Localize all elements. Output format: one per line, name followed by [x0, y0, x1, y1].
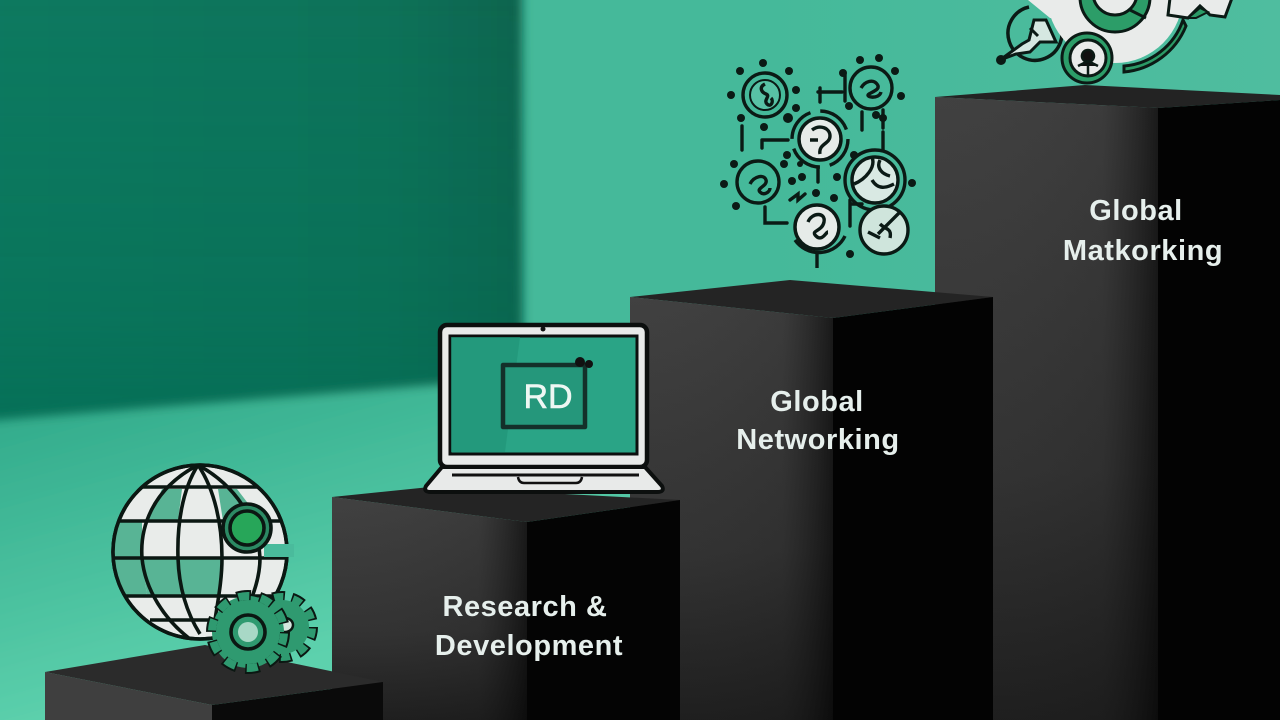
- back gear: [252, 597, 312, 657]
- icon: marketing gears: [998, 0, 1232, 83]
- label: Global Matkorking: Matkorking: [1063, 235, 1223, 267]
- large ring gear: [1028, 0, 1186, 72]
- notch in globe: [264, 544, 294, 557]
- green node: [223, 504, 271, 552]
- icon: globe with gears: [100, 465, 312, 668]
- partial gear top right: [1168, 0, 1232, 18]
- satellite dots: [720, 54, 916, 258]
- connector lines: [742, 75, 883, 226]
- label: Research & Development: Development: [435, 630, 623, 662]
- label: Research & Development: Research &: [442, 591, 608, 623]
- block 4: global marketing: [935, 85, 1280, 720]
- icon: laptop with RD: [425, 325, 663, 492]
- label: Global Networking: Global: [770, 386, 864, 418]
- small target icon: [998, 7, 1062, 64]
- small globe icon: [1062, 33, 1112, 83]
- icon: network of globes: [720, 54, 916, 268]
- RD frame: [503, 357, 593, 427]
- front gear: [212, 596, 284, 668]
- block 1: [45, 645, 383, 720]
- globe: [100, 465, 300, 639]
- node globes: [737, 67, 908, 254]
- label: Global Networking: Networking: [736, 424, 900, 456]
- block 2: research and development: [332, 487, 680, 720]
- RD frame: RD: [523, 378, 573, 416]
- label: Global Matkorking: Global: [1089, 195, 1183, 227]
- block 3: global networking: [630, 280, 993, 720]
